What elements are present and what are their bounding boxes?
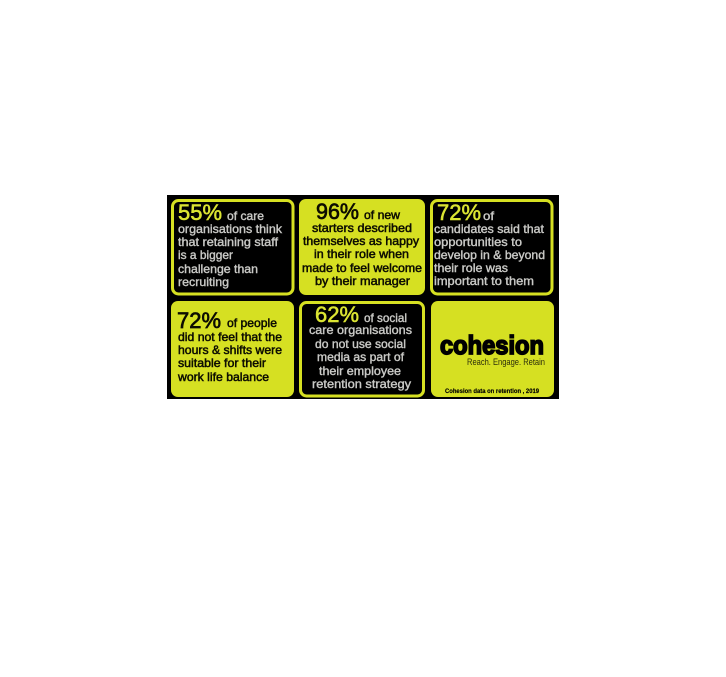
panel: 72% of candidates: candidates said that	[434, 222, 545, 236]
panel: 96% of new starters: in their role when	[314, 247, 409, 261]
panel: 55% of care organisations: that retaining staff	[178, 235, 279, 249]
panel: 62% of social care organisations: of social	[364, 311, 407, 325]
panel: 62% of social care organisations: 62%	[315, 302, 359, 327]
panel: 55% of care organisations: organisations think	[178, 222, 283, 236]
black background panel	[167, 195, 559, 399]
panel: 96% of new starters	[299, 199, 425, 295]
source note: Cohesion data on retention , 2019	[445, 388, 539, 395]
panel: 55% of care organisations: of care	[227, 209, 264, 223]
panel: 72% of candidates	[432, 200, 552, 294]
panel: 72% of people: 72%	[177, 308, 221, 333]
panel: 72% of candidates: opportunities to	[434, 235, 522, 249]
panel: 72% of people: suitable for their	[178, 356, 266, 370]
panel: 55% of care organisations: 55%	[178, 200, 222, 225]
panel: 55% of care organisations: recruiting	[178, 275, 229, 289]
panel: 96% of new starters: by their manager	[315, 274, 410, 288]
panel: 96% of new starters: themselves as happy	[303, 234, 419, 248]
panel: 55% of care organisations	[172, 200, 293, 294]
panel: 72% of candidates: 72%	[437, 200, 481, 225]
panel: 62% of social care organisations: do not use social	[315, 337, 406, 351]
panel: 72% of people: hours & shifts were	[178, 343, 282, 357]
panel: cohesion logo	[431, 301, 554, 397]
panel: 72% of candidates: develop in & beyond	[434, 248, 545, 262]
panel: 62% of social care organisations	[300, 302, 424, 396]
panel: 55% of care organisations: is a bigger	[178, 248, 233, 262]
panel: 72% of people: did not feel that the	[178, 330, 282, 344]
panel: 72% of candidates: important to them	[434, 274, 534, 288]
logo wordmark: cohesion	[440, 330, 544, 360]
panel: 96% of new starters: made to feel welcome	[302, 261, 422, 275]
panel: 62% of social care organisations: retention strategy	[312, 377, 411, 391]
panel: 55% of care organisations: challenge than	[178, 262, 258, 276]
panel: 96% of new starters: 96%	[316, 199, 359, 224]
tagline: Reach. Engage. Retain	[467, 357, 545, 368]
panel: 62% of social care organisations: media as part of	[317, 350, 405, 364]
panel: 72% of people	[171, 301, 294, 397]
panel: 96% of new starters: starters described	[312, 221, 412, 235]
panel: 96% of new starters: of new	[364, 208, 400, 222]
panel: 62% of social care organisations: their employee	[319, 364, 401, 378]
panel: 62% of social care organisations: care organisations	[309, 323, 412, 337]
panel: 72% of people: of people	[227, 316, 277, 330]
panel: 72% of candidates: their role was	[434, 261, 508, 275]
panel: 72% of people: work life balance	[177, 370, 269, 384]
panel: 72% of candidates: of	[483, 209, 495, 223]
